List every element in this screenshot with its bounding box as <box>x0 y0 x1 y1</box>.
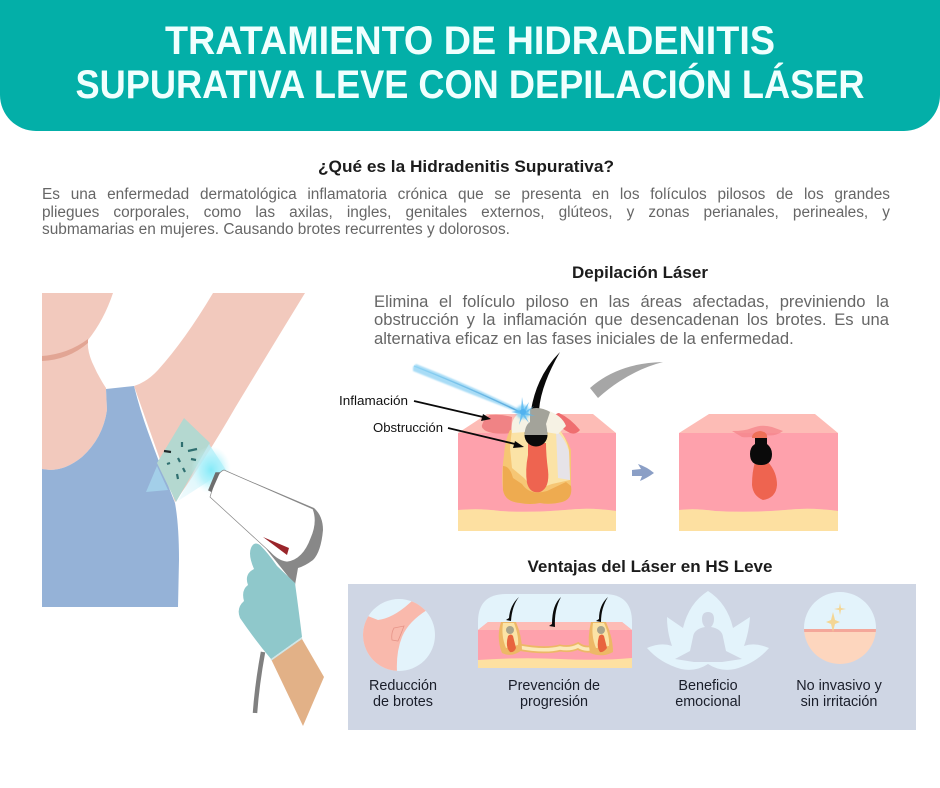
arrow: obstruccion <box>448 428 524 448</box>
laser beam <box>178 444 226 501</box>
label: prevencion: Prevención de <box>508 678 600 694</box>
text block: depilacion: alternativa eficaz en las fases iniciales de la enfermedad. <box>374 329 794 348</box>
raised arm <box>134 293 305 502</box>
tunnel <box>518 646 595 650</box>
panel: ventajas <box>348 584 916 730</box>
label: no invasivo <box>796 678 883 710</box>
label: inflamacion: Inflamación <box>339 394 408 408</box>
label: no invasivo: sin irritación <box>801 694 877 710</box>
label: prevencion: progresión <box>520 694 588 710</box>
title <box>76 19 865 107</box>
heading: que es: ¿Qué es la Hidradenitis Supurativa? <box>318 158 614 176</box>
text block: definicion: submamarias en mujeres. Causando brotes recurrentes y dolorosos. <box>42 221 510 238</box>
trigger <box>263 537 289 555</box>
title: SUPURATIVA LEVE CON DEPILACIÓN LÁSER <box>76 61 865 107</box>
laser device <box>224 470 323 585</box>
gloved hand <box>239 544 302 659</box>
heading: ventajas: Ventajas del Láser en HS Leve <box>528 558 772 576</box>
illustration: laser on armpit <box>42 293 324 726</box>
skin block <box>458 414 616 512</box>
hairs <box>506 597 519 621</box>
follicle head <box>524 424 548 446</box>
icon: armpit <box>363 599 435 671</box>
label: beneficio: emocional <box>675 694 741 710</box>
title: TRATAMIENTO DE HIDRADENITIS <box>165 19 775 63</box>
laser ray <box>413 364 521 413</box>
text block: depilacion <box>374 292 889 348</box>
icon: follicle tunnel <box>478 594 632 668</box>
inflamed patches <box>482 415 512 434</box>
arrow: before to after <box>632 464 654 481</box>
text block: definicion: Es una enfermedad dermatológica inflamatoria crónica que se presenta en los folículos pilosos de los grandes <box>42 186 890 203</box>
icon: meditation lotus <box>647 591 769 670</box>
label: prevencion <box>508 678 600 710</box>
inflammation diagram: before <box>413 352 616 531</box>
label: reduccion: Reducción <box>369 678 437 694</box>
label: obstruccion: Obstrucción <box>373 421 443 435</box>
label: beneficio: Beneficio <box>678 678 738 694</box>
text block: definicion <box>42 186 890 238</box>
hair bulb <box>526 443 548 492</box>
bulb <box>752 462 777 500</box>
neck and chest <box>42 293 113 470</box>
icon: skin sparkle <box>804 592 876 667</box>
label: reduccion: de brotes <box>373 694 433 710</box>
heading: depilacion laser: Depilación Láser <box>572 264 709 282</box>
hair stubble <box>164 442 197 479</box>
laser spark <box>511 397 535 425</box>
text block: depilacion: Elimina el folículo piloso en las áreas afectadas, previniendo la <box>374 292 889 311</box>
cable <box>255 652 263 713</box>
healed surface <box>732 426 783 437</box>
text block: depilacion: obstrucción y la inflamación que desencadenan los brotes. Es una <box>374 310 889 329</box>
shirt <box>42 386 179 607</box>
hair root <box>750 438 772 465</box>
wrist <box>271 639 324 726</box>
neck crease <box>42 339 88 361</box>
hair shaft <box>531 352 560 410</box>
label: no invasivo: No invasivo y <box>796 678 883 694</box>
label: reduccion <box>369 678 437 710</box>
inflammation diagram: after <box>679 414 838 531</box>
inflamed follicle <box>502 426 571 504</box>
label: beneficio <box>675 678 741 710</box>
light glow <box>191 446 231 494</box>
treated area <box>157 418 210 502</box>
grey curved hair <box>590 362 663 398</box>
arrow: inflamacion <box>414 401 491 421</box>
text block: definicion: pliegues corporales, como las axilas, ingles, genitales externos, glúteos, y zonas perianales, perineales, y <box>42 204 890 221</box>
title banner <box>0 0 940 131</box>
